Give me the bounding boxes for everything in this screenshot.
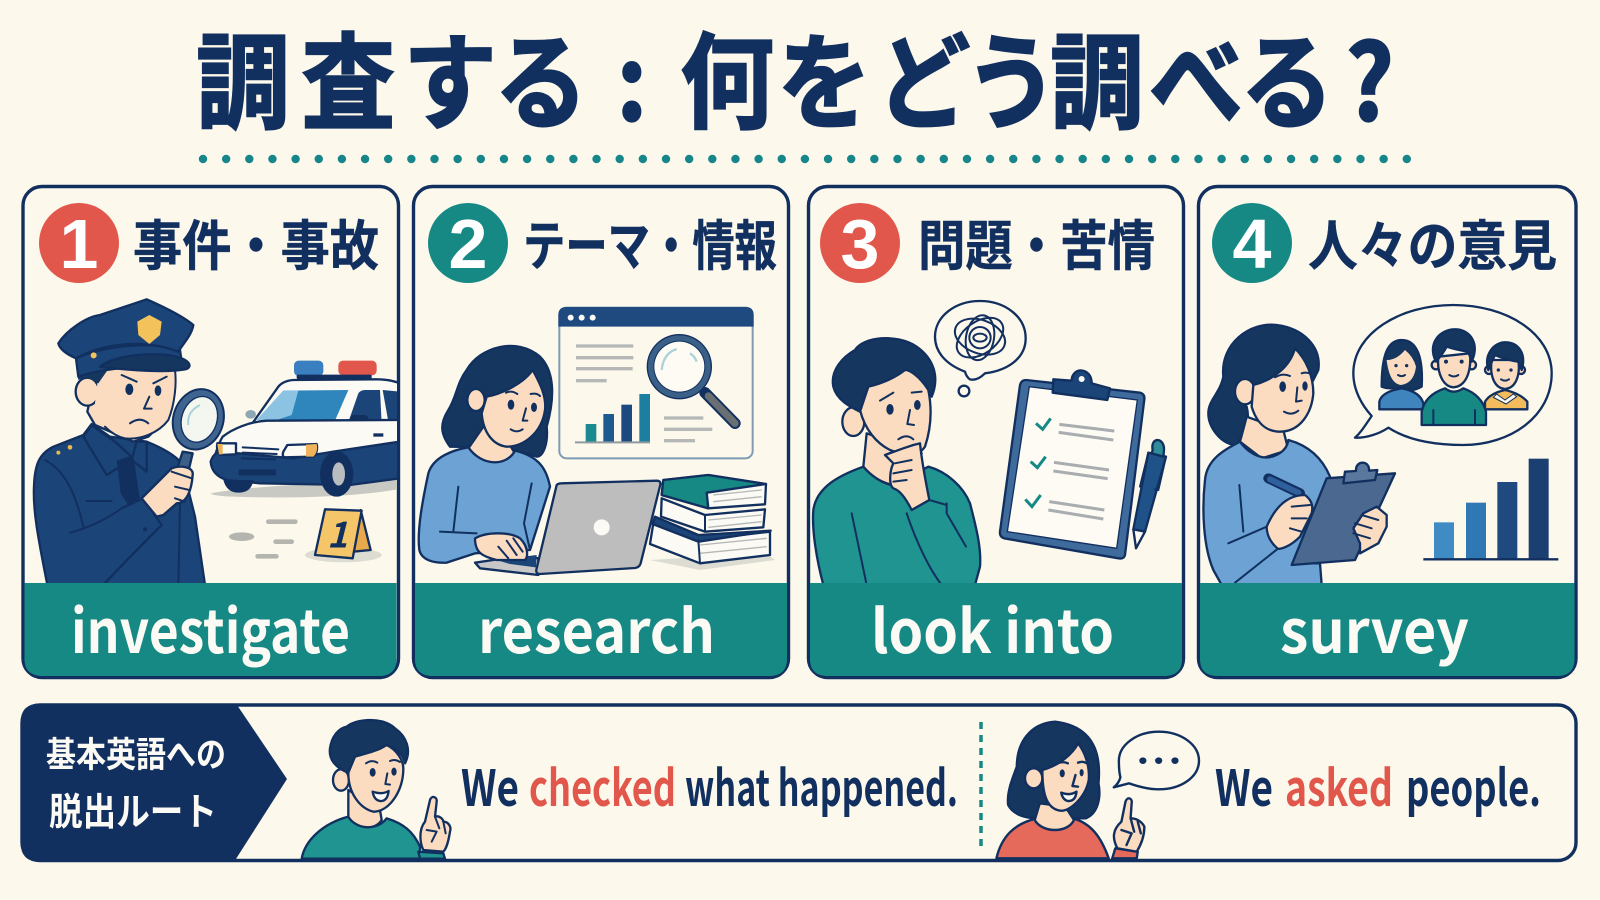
panel: research	[414, 186, 788, 678]
heading: 人々の意見: 人々の意見	[1308, 202, 1557, 281]
illustration: police officer and patrol car	[34, 299, 400, 585]
sentence: We checked what happened.: what happened.	[685, 749, 958, 821]
panel: investigate	[23, 186, 400, 678]
pen	[1133, 440, 1166, 548]
magnifying glass	[172, 388, 225, 468]
officer	[34, 299, 205, 585]
arrow label: 基本英語への	[46, 727, 226, 778]
ground marks	[229, 519, 298, 559]
number badge 2: 2	[449, 205, 487, 283]
woman	[419, 346, 552, 563]
card frame	[1198, 186, 1576, 678]
number badge 4: 4	[1233, 205, 1272, 283]
browser window	[558, 307, 754, 458]
heading: 問題・苦情: 問題・苦情	[918, 202, 1155, 281]
panel: basic English route	[20, 704, 1576, 862]
dashed separator	[979, 722, 983, 846]
number badge 3: 3	[841, 205, 879, 283]
illustration: man thinking with checklist	[813, 301, 1166, 585]
title: 調査する:何をどう調べる?	[196, 0, 1394, 150]
arrow label	[20, 704, 287, 862]
small figure: woman	[1379, 340, 1423, 409]
number badge 2	[428, 203, 508, 283]
number badge 3	[820, 203, 900, 283]
sentence: We checked what happened.: We	[461, 749, 519, 821]
band: research: research	[478, 584, 715, 671]
woman with clipboard	[1203, 325, 1395, 585]
band: look into: look into	[871, 584, 1114, 671]
band: survey	[1200, 583, 1574, 676]
small figure: man	[1422, 329, 1486, 425]
patrol car	[211, 361, 400, 497]
stack of books	[650, 475, 775, 570]
band: survey: survey	[1280, 584, 1469, 671]
laptop and hand	[475, 481, 660, 575]
panel: look into	[808, 186, 1184, 678]
illustration: woman surveying people	[1203, 305, 1558, 585]
strip frame	[22, 705, 1576, 860]
heading: テーマ・情報: テーマ・情報	[523, 202, 777, 281]
illustration: woman researching on laptop	[419, 307, 775, 575]
small figure: boy	[1485, 342, 1527, 409]
sentence: We asked people.	[1215, 749, 1541, 821]
man pointing	[302, 720, 450, 859]
number badge 1	[39, 203, 119, 283]
number badge 4	[1212, 203, 1292, 283]
band: research	[415, 583, 787, 676]
dotted divider	[203, 155, 1408, 163]
evidence marker: 1	[327, 507, 348, 558]
evidence marker	[305, 507, 382, 562]
sentence: We checked what happened.: checked	[529, 749, 676, 821]
thought bubble	[935, 301, 1026, 396]
officer hand	[142, 467, 193, 517]
man	[813, 338, 980, 585]
sentence: We asked people.: We	[1215, 749, 1273, 821]
card frame	[23, 186, 398, 678]
sentence: We checked what happened.	[461, 749, 958, 821]
woman pointing with speech bubble	[996, 722, 1199, 858]
speech bubble with people	[1353, 305, 1552, 445]
bar chart	[1423, 459, 1558, 559]
card frame	[414, 186, 788, 678]
sentence: We asked people.: asked	[1285, 749, 1393, 821]
card frame	[808, 186, 1184, 678]
band: look into	[810, 583, 1182, 676]
arrow label: 脱出ルート	[49, 781, 217, 836]
clipboard checklist	[1000, 370, 1144, 559]
heading: 事件・事故: 事件・事故	[133, 202, 379, 281]
sentence: We asked people.: people.	[1406, 749, 1541, 821]
band: investigate: investigate	[71, 584, 350, 671]
number badge 1: 1	[60, 205, 98, 283]
panel: survey	[1198, 186, 1576, 678]
